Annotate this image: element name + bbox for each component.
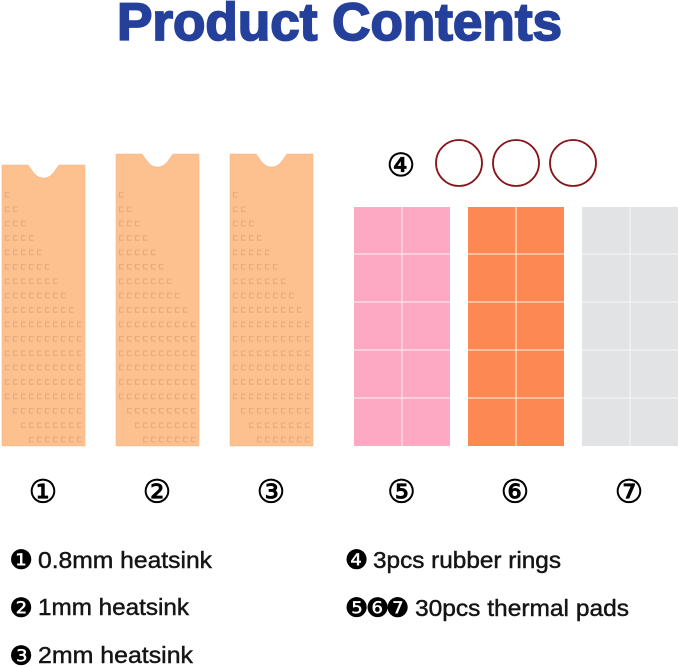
legend: rubber rings bbox=[344, 545, 561, 576]
legend: 1mm heatsink: ❷ bbox=[9, 593, 33, 624]
legend: 0.8mm heatsink: ❶ bbox=[9, 545, 33, 576]
number markers: ⑦ bbox=[615, 472, 643, 510]
legend: thermal pads: ❺❻❼ bbox=[344, 593, 410, 624]
heatsink 1 bbox=[2, 165, 85, 449]
legend: 0.8mm heatsink bbox=[9, 545, 213, 576]
number markers: ② bbox=[143, 472, 171, 510]
number markers: ⑤ bbox=[387, 472, 416, 510]
legend: 1mm heatsink: 1mm heatsink bbox=[38, 594, 190, 620]
heatsink 3 bbox=[230, 154, 313, 449]
number markers bbox=[29, 146, 643, 510]
number markers: ⑥ bbox=[501, 472, 529, 510]
legend: rubber rings: 3pcs rubber rings bbox=[373, 547, 561, 573]
legend: thermal pads bbox=[344, 593, 629, 624]
heatsink 2 bbox=[116, 154, 199, 449]
thermal pad sheet: orange bbox=[468, 207, 564, 446]
legend: rubber rings: ❹ bbox=[344, 545, 369, 576]
thermal pad sheet: grey bbox=[582, 207, 678, 446]
thermal pad sheet: pink bbox=[354, 207, 450, 446]
number markers: ① bbox=[29, 472, 57, 510]
number markers: ④ bbox=[387, 146, 415, 184]
legend: thermal pads: 30pcs thermal pads bbox=[415, 595, 629, 621]
rubber rings bbox=[436, 140, 596, 186]
legend: 1mm heatsink bbox=[9, 593, 190, 624]
number markers: ③ bbox=[257, 472, 285, 510]
legend: 0.8mm heatsink: 0.8mm heatsink bbox=[38, 547, 213, 573]
